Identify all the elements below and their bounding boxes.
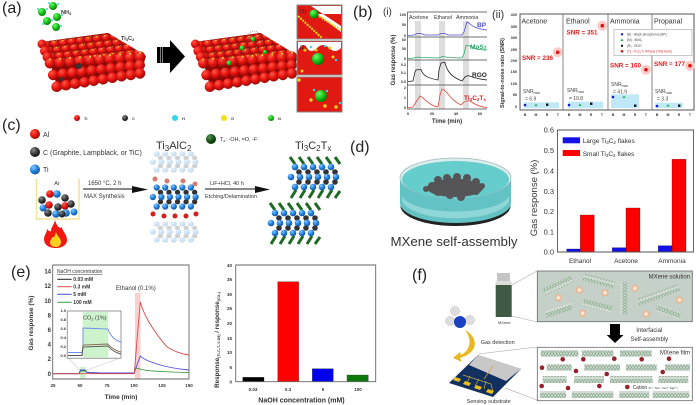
icon: sensing substrate: Sensing substrate — [467, 399, 511, 405]
chart ii: signal-to-noise ratio: T — [689, 113, 692, 117]
precursor legend — [30, 129, 142, 174]
inset: CO2 response: CO — [83, 316, 91, 322]
Ti3C2 block before adsorption: 3 — [126, 37, 129, 42]
bar chart: flake size: Gas response (%) — [529, 160, 540, 236]
chart i: gas response traces: 60 — [402, 38, 406, 42]
line chart: gas response vs time — [28, 265, 193, 401]
line chart: gas response vs time: 150 — [185, 383, 193, 388]
concentration legend: 0.3 mM — [73, 284, 90, 290]
bar chart: flake size: 0.5 — [544, 146, 554, 155]
bar chart: selectivity: 0 — [229, 380, 232, 384]
concentration legend: NaOH concentration — [57, 269, 103, 275]
arrow: self-assembly — [607, 324, 624, 343]
chart ii: signal-to-noise ratio: Acetone — [522, 18, 547, 26]
MXene film box: MXene film — [660, 350, 690, 356]
bar chart: selectivity: 0.03 — [249, 387, 258, 392]
bar chart: flake size: Acetone — [614, 258, 638, 265]
chart i: gas response traces: 20 — [430, 111, 435, 116]
line chart: gas response vs time: 14 — [44, 270, 52, 276]
chart i: gas response traces: 100 — [400, 13, 406, 17]
chart ii: signal-to-noise ratio: T — [645, 113, 648, 117]
termination legend — [206, 134, 258, 144]
chart i: gas response traces: 30 — [402, 47, 406, 51]
line chart: gas response vs time: 6 — [48, 328, 52, 334]
chart ii: signal-to-noise ratio: = 10.8 — [569, 96, 583, 102]
chart ii: signal-to-noise ratio: SNR = 177 — [654, 61, 685, 68]
concentration legend: 5 mM — [73, 292, 86, 298]
bar chart: flake size: Ethanol — [569, 258, 592, 265]
precursor legend: Ti — [43, 167, 49, 174]
chart ii: signal-to-noise ratio: R — [546, 113, 549, 117]
flake legend: flakes — [616, 151, 635, 158]
chart i: gas response traces: 3 — [470, 97, 473, 102]
SNR legend: (B) - Black phosphorus (BP) — [627, 32, 667, 36]
line chart: gas response vs time: 25 — [50, 383, 56, 388]
label: interfacial self-assembly: Self-assembly — [630, 337, 668, 343]
label: interfacial self-assembly: Interfacial — [636, 328, 662, 334]
bar chart: selectivity — [214, 263, 376, 404]
chart ii: signal-to-noise ratio: M — [623, 113, 626, 117]
chart ii: signal-to-noise ratio — [492, 9, 695, 117]
NH3 molecules — [37, 2, 72, 31]
panel e: NaOH concentration — [11, 263, 376, 404]
chart ii: signal-to-noise ratio: Propanal — [654, 18, 682, 26]
flake legend: 2 — [613, 140, 616, 145]
Ti3C2Tx title and flakes — [268, 140, 340, 244]
chart ii: signal-to-noise ratio: max — [666, 91, 672, 95]
flake legend: C — [609, 138, 614, 145]
Ti3AlC2 title and crystal: AlC — [169, 140, 187, 152]
SNR legend: (T) - Ti₃C₂Tₓ MXene (This work) — [627, 50, 672, 54]
line chart: gas response vs time: 0 — [48, 372, 52, 378]
chart ii: signal-to-noise ratio: 200 — [511, 59, 517, 63]
Ti3AlC2 title and crystal: 2 — [187, 144, 192, 153]
chart ii: signal-to-noise ratio: 400 — [511, 13, 517, 17]
SNR legend: (R) - RGO — [627, 44, 642, 48]
icon: MXene bottle — [496, 271, 537, 325]
chart i: gas response traces: 0 — [404, 57, 406, 61]
bar chart: flake size: 0.6 — [544, 126, 554, 134]
chart ii: signal-to-noise ratio: B — [656, 113, 659, 117]
zoom insets 1-3: (2) — [300, 45, 306, 51]
concentration legend — [57, 269, 103, 306]
chart i: gas response traces: 40 — [454, 111, 459, 116]
chart ii: signal-to-noise ratio: 100 — [511, 82, 517, 86]
chart i: gas response traces: BP — [477, 22, 487, 29]
atom legend — [74, 115, 281, 121]
chart i: gas response traces: Acetone — [409, 15, 428, 21]
chart ii: signal-to-noise ratio: B — [612, 113, 615, 117]
line chart: gas response vs time: 125 — [158, 383, 166, 388]
chart i: gas response traces: C — [472, 95, 477, 102]
line chart: gas response vs time: 50 — [77, 383, 83, 388]
bar chart: selectivity: 30 — [227, 292, 232, 297]
chart ii: signal-to-noise ratio: = 6.9 — [525, 96, 536, 102]
chart ii: signal-to-noise ratio: M — [667, 113, 670, 117]
chart ii: signal-to-noise ratio: T — [601, 113, 604, 117]
precursor legend: C (Graphite, Lampblack, or TiC) — [43, 150, 142, 157]
chart ii: signal-to-noise ratio: SNR — [611, 82, 622, 88]
panel a: NH3 adsorption on Ti3C2 — [2, 0, 342, 121]
chart ii: signal-to-noise ratio: Signal-to-noise ratio (SNR) — [500, 38, 506, 108]
chart i: gas response traces: 2 — [477, 97, 480, 102]
arrow: MAX synthesis: MAX Synthesis — [84, 194, 125, 200]
icon: flame — [44, 220, 67, 248]
chart i: gas response traces: (i) — [383, 7, 392, 18]
Ti3C2Tx title and flakes: C — [308, 140, 316, 152]
Ti3AlC2 title and crystal: 3 — [165, 144, 170, 153]
chart ii: signal-to-noise ratio: max — [622, 84, 628, 88]
bar chart: selectivity: NaOH concentration (mM) — [258, 398, 345, 404]
arrow: MAX synthesis: 1650 °C, 2 h — [88, 181, 121, 187]
Ti3C2 block before adsorption: C — [128, 36, 132, 42]
arrow: etching: Etching/Delamination — [205, 194, 257, 200]
bar chart: selectivity: 15 — [227, 336, 232, 341]
bar chart: flake size: Ammonia — [658, 258, 686, 265]
Ti3AlC2 title and crystal — [150, 140, 199, 243]
inset: CO2 response: 2 — [91, 316, 94, 322]
bar chart: selectivity: (Ti₃C₂Tₓ 0.3M) — [217, 335, 221, 358]
big black arrow — [157, 40, 185, 73]
bar chart: selectivity: 0.3 — [285, 387, 292, 392]
NH3 molecules: 3 — [69, 11, 72, 16]
chart ii: signal-to-noise ratio: max — [534, 91, 540, 95]
chart i: gas response traces: 0.0 — [401, 80, 406, 84]
atom legend: Ti — [84, 116, 87, 121]
chart ii: signal-to-noise ratio: = 41.9 — [613, 90, 627, 96]
precursor legend: Al — [43, 132, 50, 139]
concentration legend: 100 mM — [73, 300, 92, 306]
chart i: gas response traces: 2 — [404, 86, 406, 90]
line chart: gas response vs time: 12 — [44, 284, 52, 290]
chart ii: signal-to-noise ratio: M — [535, 113, 538, 117]
chart ii: signal-to-noise ratio: 0 — [515, 105, 517, 109]
bar chart: selectivity: 5 — [229, 365, 232, 370]
inset: CO2 response: 0.8 — [60, 317, 67, 322]
line chart: gas response vs time: Gas response (%) — [28, 296, 35, 350]
bar chart: selectivity: (CO₂) — [217, 292, 221, 301]
bar chart: selectivity: 10 — [227, 350, 232, 355]
inset: CO2 response: 0.4 — [60, 335, 67, 340]
chart i: gas response traces: Ti — [464, 95, 470, 102]
chart ii: signal-to-noise ratio: = 3.3 — [657, 96, 668, 102]
heading (d): (d) — [350, 139, 370, 156]
chart i: gas response traces: MoS — [470, 44, 484, 51]
chart ii: signal-to-noise ratio: 350 — [511, 25, 517, 29]
termination legend: T — [220, 137, 223, 143]
inset: CO2 response: 0.2 — [60, 344, 67, 349]
chart ii: signal-to-noise ratio: 50 — [513, 93, 517, 97]
flake legend: 3 — [606, 140, 609, 145]
chart ii: signal-to-noise ratio: R — [634, 113, 637, 117]
chart i: gas response traces: Ammonia — [456, 15, 478, 21]
Ti3C2Tx title and flakes: 2 — [316, 144, 321, 153]
chart i: gas response traces: 0.1 — [401, 71, 406, 75]
line chart: gas response vs time: 8 — [48, 314, 52, 320]
bar chart: flake size: 0.3 — [544, 187, 554, 196]
chart ii: signal-to-noise ratio: (ii) — [492, 9, 504, 21]
termination legend: x — [223, 138, 225, 143]
atom legend: O — [231, 116, 234, 121]
atom legend: C — [132, 116, 135, 121]
MXene film box — [537, 347, 692, 401]
chart i: gas response traces: 50 — [402, 23, 406, 27]
chart ii: signal-to-noise ratio: 300 — [511, 36, 517, 40]
bar chart: flake size: 0.1 — [544, 228, 554, 236]
inset: CO2 response: 0.6 — [60, 326, 67, 331]
Ti3C2 block after adsorption — [191, 31, 298, 92]
chart ii: signal-to-noise ratio: 250 — [511, 48, 517, 52]
line chart: gas response vs time: Ethanol (0.1%) — [116, 286, 156, 292]
chart ii: signal-to-noise ratio: M — [579, 113, 582, 117]
chart ii: signal-to-noise ratio: SNR = 351 — [566, 29, 598, 36]
inset: CO2 response: (1%) — [93, 316, 107, 322]
MXene solution box — [537, 271, 692, 322]
chart ii: signal-to-noise ratio: B — [524, 113, 527, 117]
chart i: gas response traces: Ethanol — [434, 15, 452, 21]
chart ii: signal-to-noise ratio: SNR — [567, 88, 578, 94]
line chart: gas response vs time: 4 — [48, 342, 52, 348]
Ti3C2Tx title and flakes: x — [327, 144, 331, 153]
crucible with Ar — [36, 179, 79, 219]
zoom insets 1-3: (1) — [300, 9, 306, 15]
panel c: synthesis of Ti3C2Tx — [2, 117, 340, 248]
MXene solution box: MXene solution — [649, 274, 690, 280]
chart ii: signal-to-noise ratio: SNR = 236 — [522, 55, 553, 62]
Ti3C2Tx title and flakes: Ti — [295, 140, 304, 152]
concentration legend: 0.03 mM — [73, 277, 93, 283]
heading (f): (f) — [412, 267, 427, 284]
arrow: etching — [205, 181, 270, 200]
line chart: gas response vs time: 100 — [130, 383, 138, 388]
Ti3C2 block before adsorption — [38, 33, 146, 92]
line chart: gas response vs time: 75 — [104, 383, 110, 388]
chart ii: signal-to-noise ratio: Ethanol — [566, 18, 590, 26]
arrow: etching: LiF+HCl, 40 h — [210, 181, 244, 187]
heading (e): (e) — [11, 264, 31, 281]
flake legend: flakes — [616, 138, 635, 145]
chart ii: signal-to-noise ratio: R — [678, 113, 681, 117]
bar chart: selectivity: 40 — [227, 263, 232, 268]
bar chart: flake size: 0.4 — [544, 166, 554, 176]
Ti3C2 block before adsorption: Ti — [121, 36, 126, 42]
icon: sensing substrate — [449, 347, 537, 405]
chart ii: signal-to-noise ratio: R — [590, 113, 593, 117]
chart i: gas response traces: 0.2 — [401, 63, 406, 67]
chart ii: signal-to-noise ratio: 150 — [511, 70, 517, 74]
zoom insets 1-3 — [297, 5, 342, 112]
Ti3C2 block before adsorption: 2 — [132, 37, 135, 42]
inset: CO2 response: 1.0 — [60, 308, 67, 313]
chart ii: signal-to-noise ratio: SNR = 160 — [610, 63, 641, 70]
inset: CO2 response — [60, 308, 121, 358]
flake legend: C — [608, 151, 613, 158]
bar chart: selectivity: 5 — [322, 387, 325, 392]
Ti3AlC2 title and crystal: Ti — [156, 140, 165, 152]
label: gas detection: Gas detection — [481, 340, 515, 346]
atom legend: H — [182, 116, 185, 121]
SNR legend: (M) - MoS₂ — [627, 38, 643, 42]
icon: petri dish — [400, 158, 511, 226]
bar chart: selectivity: 20 — [227, 321, 232, 326]
chart ii: signal-to-noise ratio: B — [568, 113, 571, 117]
chart i: gas response traces: 1 — [404, 96, 406, 100]
flake legend: Large Ti — [583, 138, 606, 145]
heading (a): (a) — [2, 0, 22, 17]
chart i: gas response traces — [383, 7, 487, 125]
SNR legend — [614, 30, 692, 56]
arrow: MAX synthesis — [83, 181, 148, 200]
Ti3C2Tx title and flakes: T — [321, 140, 328, 152]
chart ii: signal-to-noise ratio: T — [557, 113, 560, 117]
chart ii: signal-to-noise ratio: SNR — [523, 89, 534, 95]
chart i: gas response traces: 0 — [404, 106, 406, 110]
chart i: gas response traces: x — [483, 97, 486, 102]
bar chart: selectivity: 35 — [227, 277, 232, 282]
bar chart: selectivity: 25 — [227, 306, 232, 311]
line chart: gas response vs time: Time (min) — [105, 394, 137, 401]
arrow: gas detection — [453, 330, 475, 362]
chart ii: signal-to-noise ratio: max — [578, 90, 584, 94]
flake legend — [563, 137, 635, 158]
atom legend: N — [278, 116, 281, 121]
termination legend: : -OH, =O, -F — [225, 137, 258, 143]
bar chart: flake size: 0.0 — [544, 248, 554, 256]
icon: NH3 molecule — [446, 306, 474, 328]
bar chart: flake size: 0.2 — [544, 207, 554, 216]
flake legend: 3 — [606, 153, 609, 158]
Ti3C2Tx title and flakes: 3 — [304, 144, 309, 153]
bar chart: selectivity: Response — [214, 358, 221, 388]
icon: MXene bottle: MXene — [498, 320, 511, 325]
bar chart: selectivity: / response — [214, 301, 221, 335]
bar chart: flake size — [529, 126, 694, 265]
flake legend: 2 — [613, 153, 616, 158]
line chart: gas response vs time: 2 — [48, 357, 52, 363]
line chart: gas response vs time: 10 — [44, 299, 52, 305]
panel b: gas response and SNR — [353, 4, 695, 125]
chart i: gas response traces: RGO — [472, 72, 487, 79]
heading (c): (c) — [2, 117, 21, 134]
chart i: gas response traces: 0 — [407, 111, 410, 116]
chart i: gas response traces: 0 — [404, 34, 406, 38]
bar chart: selectivity: 100 — [354, 387, 362, 392]
chart i: gas response traces: 60 — [478, 111, 483, 116]
caption: MXene self-assembly — [390, 234, 518, 249]
chart i: gas response traces: T — [479, 95, 483, 102]
panel d: self-assembly and flake-size response — [350, 126, 694, 265]
NH3 molecules: NH — [61, 10, 69, 16]
chart i: gas response traces: 2 — [484, 46, 487, 52]
flake legend: Small Ti — [583, 151, 606, 158]
MXene film box: Cation (K⁺, Na⁺, Ca²⁺, Mg²⁺) — [633, 385, 678, 391]
panel f: interfacial self-assembly — [412, 267, 692, 405]
inset: CO2 response: 0.0 — [60, 353, 67, 358]
crucible with Ar: Ar — [54, 181, 60, 187]
chart i: gas response traces: Gas response (%) — [391, 35, 397, 85]
chart ii: signal-to-noise ratio: Ammonia — [610, 18, 640, 26]
heading (b): (b) — [353, 4, 373, 21]
chart ii: signal-to-noise ratio: SNR — [655, 89, 666, 95]
chart i: gas response traces: Time (min) — [432, 119, 462, 125]
